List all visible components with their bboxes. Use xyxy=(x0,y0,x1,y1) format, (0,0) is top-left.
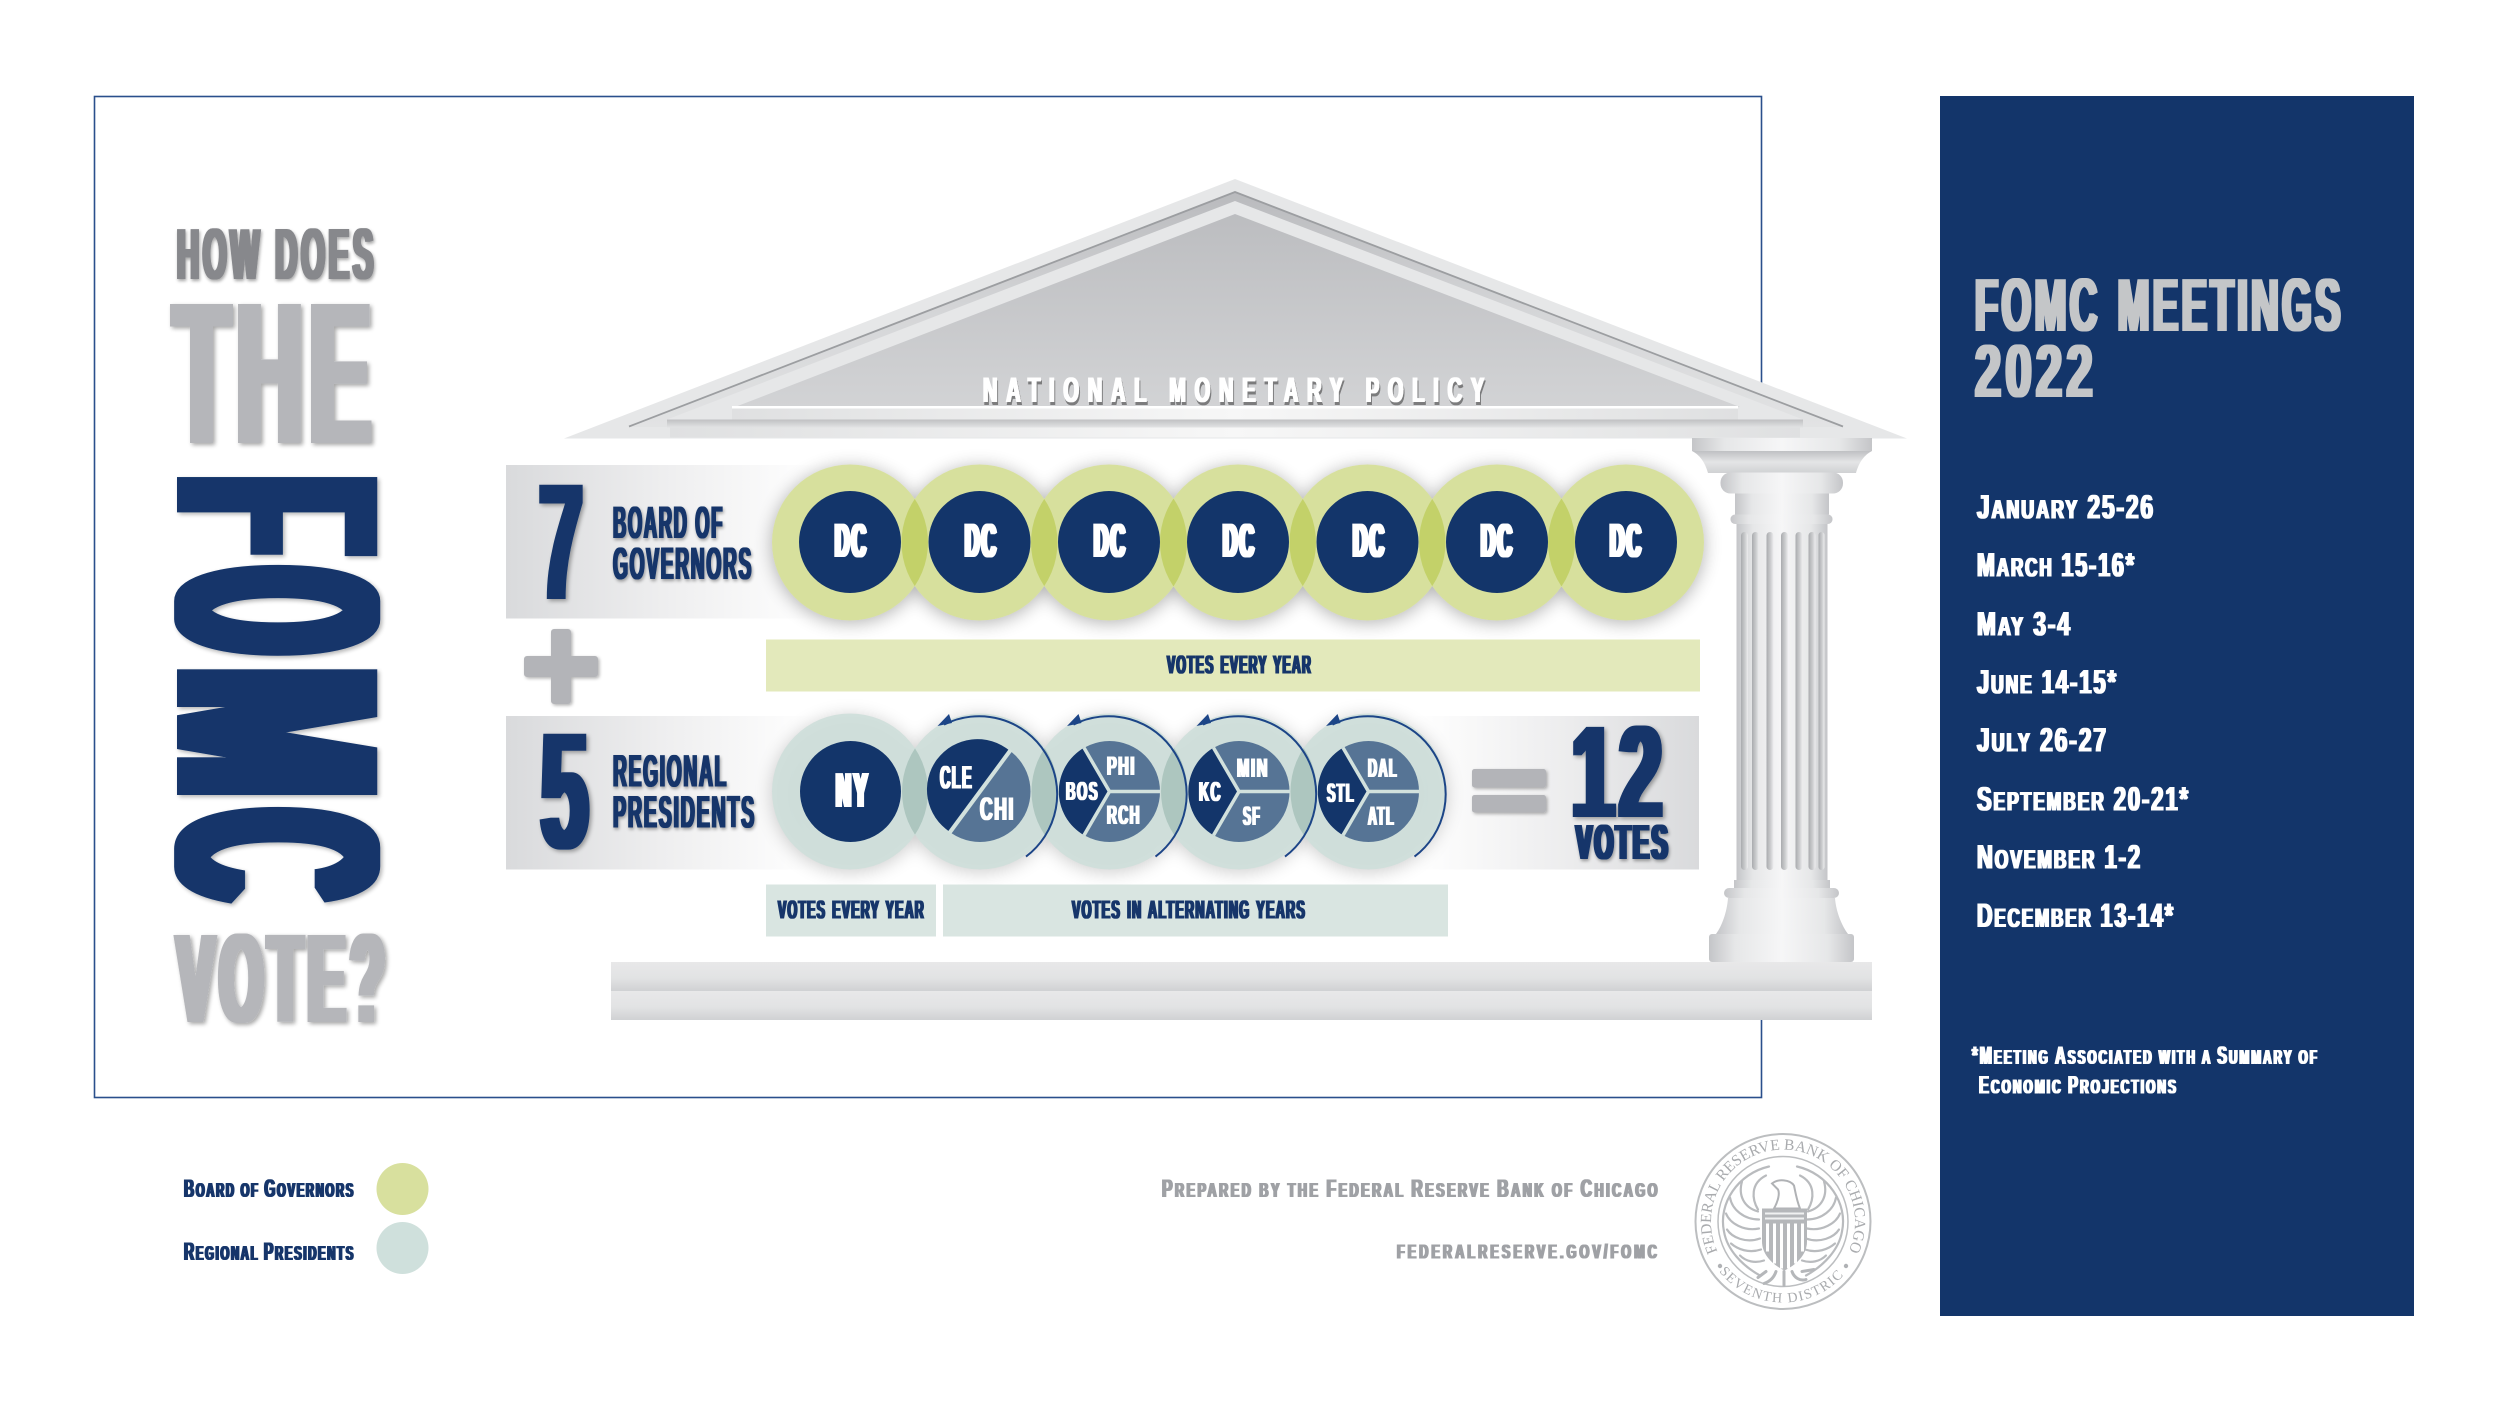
disc: Kansas City, Minneapolis, San Francisco: KC xyxy=(1199,776,1222,807)
panel: main frame xyxy=(94,96,1762,1098)
credit lines xyxy=(1162,1175,1660,1264)
legend item: regional presidents xyxy=(184,1222,428,1274)
row: board circles xyxy=(772,464,1704,623)
row: board of governors band xyxy=(506,450,820,635)
building: pediment xyxy=(564,179,1907,438)
legend item: board of governors xyxy=(184,1163,428,1215)
disc: Boston, Philadelphia, Richmond: BOS xyxy=(1066,776,1099,806)
governor labels: DC xyxy=(1223,515,1256,568)
eagle wings xyxy=(1723,1166,1843,1276)
disc: New York xyxy=(800,741,901,842)
plus sign xyxy=(524,629,598,704)
disc: Boston, Philadelphia, Richmond xyxy=(1059,741,1160,842)
caption: NY votes every year: VOTES EVERY YEAR xyxy=(778,894,925,924)
row: board of governors band: 7 xyxy=(540,450,582,635)
disc: Kansas City, Minneapolis, San Francisco: MIN xyxy=(1237,753,1269,783)
disc: St. Louis, Dallas, Atlanta: ATL xyxy=(1368,801,1395,831)
governor labels: DC xyxy=(1094,515,1127,568)
disc: Boston, Philadelphia, Richmond: RCH xyxy=(1107,800,1141,830)
footnote: *MEETING ASSOCIATED WITH A SUMMARY OF xyxy=(1972,1042,2319,1070)
seal: Federal Reserve Bank of Chicago xyxy=(1694,1133,1872,1310)
title: how does the FOMC vote xyxy=(115,215,440,1049)
disc: Kansas City, Minneapolis, San Francisco: SF xyxy=(1243,801,1261,831)
equals sign xyxy=(1472,769,1546,812)
caption: NY votes every year xyxy=(766,884,936,936)
governor labels: DC xyxy=(965,515,998,568)
caption: board votes every year xyxy=(766,640,1700,692)
meeting dates xyxy=(1977,488,2190,935)
disc: Cleveland and Chicago xyxy=(927,739,1030,842)
caption: votes in alternating years xyxy=(943,884,1448,936)
row: regional circles xyxy=(772,714,1446,872)
meeting dates: SEPTEMBER 20-21* xyxy=(1977,780,2190,818)
total: 12 votes: 12 xyxy=(1572,698,1667,845)
legend item: board of governors: BOARD OF GOVERNORS xyxy=(184,1175,355,1203)
disc: St. Louis, Dallas, Atlanta: STL xyxy=(1327,778,1355,808)
governor labels: DC xyxy=(1353,515,1386,568)
label: regional presidents: REGIONAL xyxy=(613,746,728,796)
title line: FOMC rotated: M xyxy=(115,668,440,796)
disc: Cleveland and Chicago: CHI xyxy=(980,791,1015,827)
row: regional presidents band xyxy=(506,699,1699,884)
disc: Boston, Philadelphia, Richmond: PHI xyxy=(1107,751,1136,781)
meeting dates: MARCH 15-16* xyxy=(1977,546,2136,584)
meeting dates: JUNE 14-15* xyxy=(1977,664,2118,702)
eagle emblem xyxy=(1723,1166,1843,1286)
credit lines: PREPARED BY THE FEDERAL RESERVE BANK OF CHICAGO xyxy=(1162,1175,1660,1203)
footnote xyxy=(1972,1042,2319,1100)
governor labels: DC xyxy=(1481,515,1514,568)
caption: board votes every year: VOTES EVERY YEAR xyxy=(1167,650,1312,680)
meeting dates: MAY 3-4 xyxy=(1977,606,2072,644)
disc: St. Louis, Dallas, Atlanta xyxy=(1318,741,1419,842)
governor labels: DC xyxy=(835,515,868,568)
title line: FOMC rotated: F xyxy=(115,478,440,552)
rotation arrows xyxy=(938,714,1446,857)
text: VOTES xyxy=(1576,816,1670,870)
row: regional presidents band: PRESIDENTS xyxy=(613,786,756,838)
caption: votes in alternating years: VOTES IN ALTERNATING YEARS xyxy=(1072,894,1306,924)
disc: New York: NY xyxy=(836,764,870,818)
title: how does the FOMC vote: C xyxy=(115,811,440,898)
olive branch xyxy=(1758,1270,1814,1286)
building: steps xyxy=(611,962,1872,1020)
legend xyxy=(184,1163,428,1274)
row: board circles: DC xyxy=(1610,515,1643,568)
shield xyxy=(1762,1208,1807,1270)
label: board of governors: BOARD OF xyxy=(613,497,724,548)
number five: 5 xyxy=(541,699,588,884)
total: 12 votes xyxy=(1572,698,1670,870)
row: board of governors band: GOVERNORS xyxy=(613,538,753,589)
title: how does the FOMC vote: VOTE? xyxy=(177,908,390,1049)
title line: FOMC rotated: O xyxy=(115,570,440,651)
footnote: ECONOMIC PROJECTIONS xyxy=(1979,1072,2178,1100)
credit lines: FEDERALRESERVE.GOV/FOMC xyxy=(1397,1242,1660,1264)
disc: Kansas City, Minneapolis, San Francisco xyxy=(1188,741,1290,842)
meeting dates: JULY 26-27 xyxy=(1977,722,2108,760)
building: column xyxy=(1692,438,1872,962)
meeting dates: NOVEMBER 1-2 xyxy=(1977,838,2142,876)
pediment label: NATIONAL MONETARY POLICY xyxy=(983,371,1493,410)
governor labels xyxy=(835,515,1643,568)
title: how does the FOMC vote: HOW DOES xyxy=(177,215,377,295)
eagle head xyxy=(1772,1180,1800,1208)
seal: Federal Reserve Bank of Chicago: SEVENTH DISTRICT xyxy=(1720,1267,1843,1302)
title: how does the FOMC vote: THE xyxy=(174,260,378,486)
disc: Cleveland and Chicago: CLE xyxy=(940,760,973,796)
meeting dates: JANUARY 25-26 xyxy=(1977,488,2155,526)
meeting dates: DECEMBER 13-14* xyxy=(1977,897,2175,935)
governor discs xyxy=(799,491,1677,593)
panel heading xyxy=(1975,263,2344,413)
panel: FOMC meetings 2022 xyxy=(1940,96,2414,1316)
seal: Federal Reserve Bank of Chicago: FEDERAL RESERVE BANK OF CHICAGO xyxy=(1700,1139,1866,1255)
label: regional presidents xyxy=(613,746,756,838)
panel heading: 2022 xyxy=(1975,329,2097,413)
legend item: regional presidents: REGIONAL PRESIDENTS xyxy=(184,1238,355,1266)
disc: St. Louis, Dallas, Atlanta: DAL xyxy=(1368,753,1398,783)
label: board of governors xyxy=(613,497,753,589)
